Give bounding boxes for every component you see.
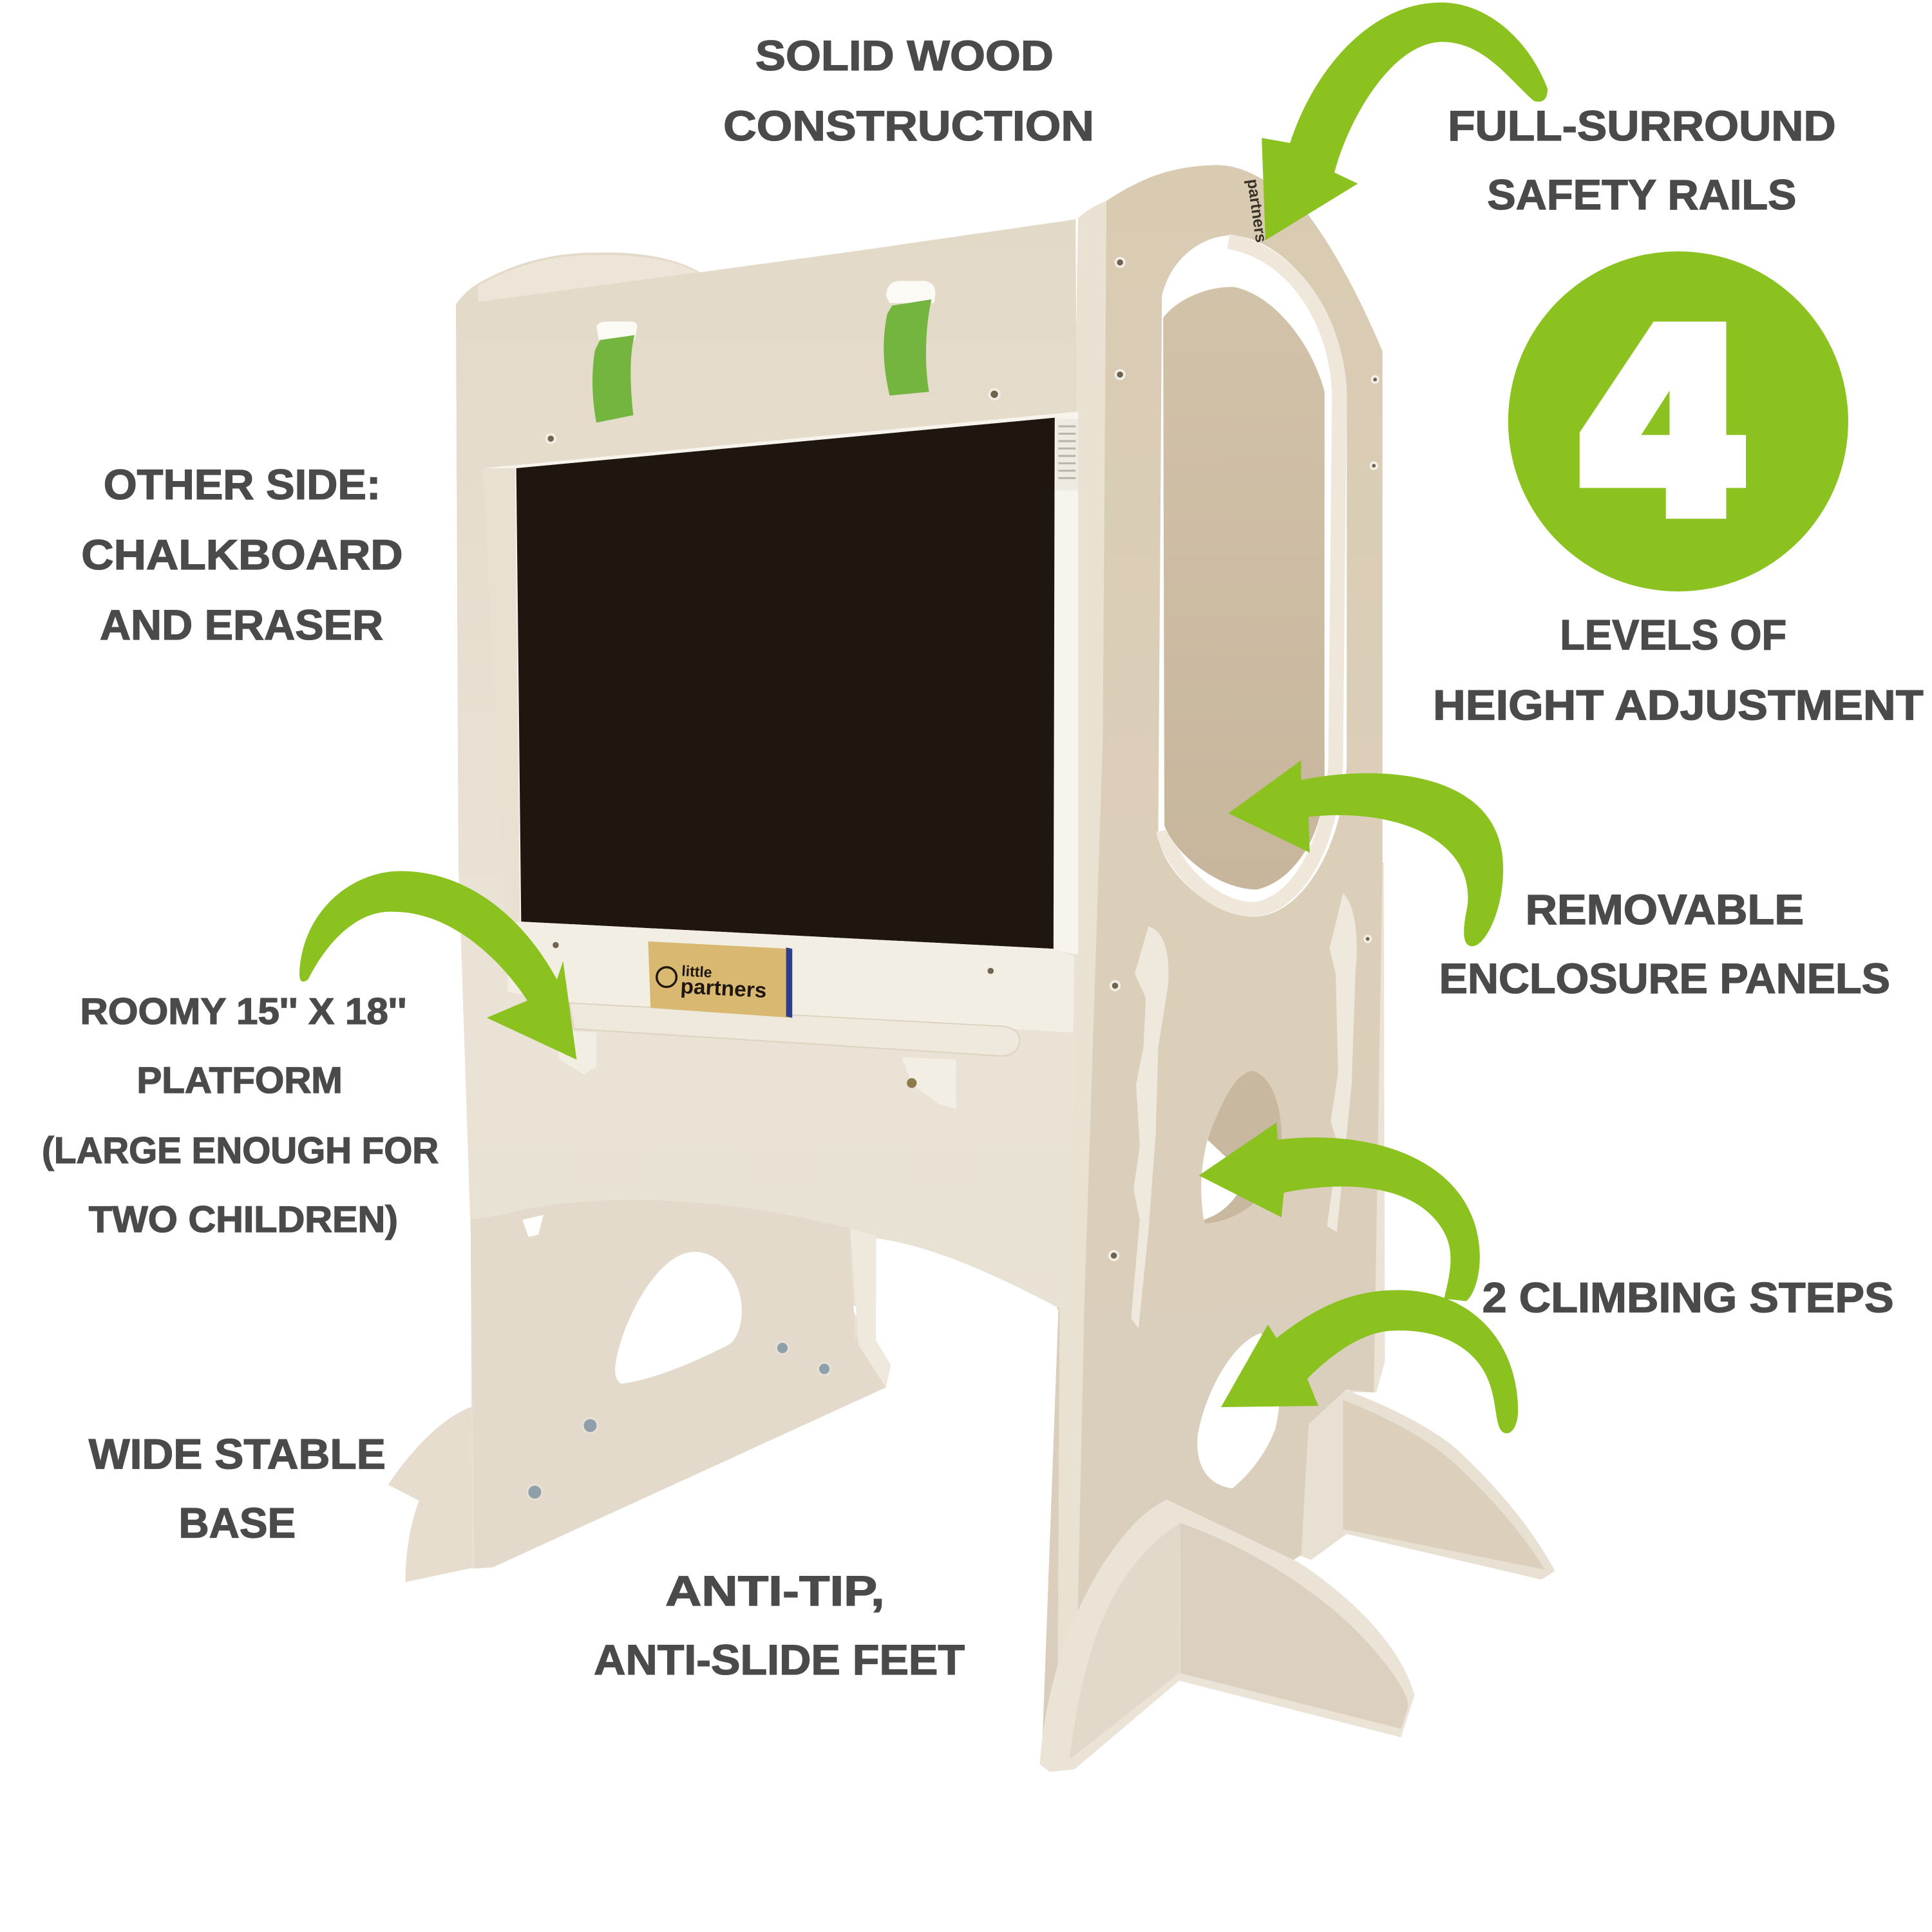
- text: removable enclosure panels: ENCLOSURE PANELS: [1439, 954, 1890, 1002]
- rear left foot: [388, 1407, 493, 1582]
- top-left rear arch: [478, 255, 697, 302]
- left frame bevel: [483, 468, 520, 924]
- arched rim: [1163, 242, 1340, 909]
- green strap left: [592, 321, 637, 422]
- text: other side chalkboard and eraser: AND ERASER: [100, 601, 383, 649]
- text: other side chalkboard and eraser: CHALKBOARD: [81, 531, 403, 578]
- text: solid wood construction: SOLID WOOD: [755, 32, 1054, 79]
- text: levels of height adjustment: HEIGHT ADJUSTMENT: [1433, 681, 1924, 728]
- side panel arched opening: [1158, 235, 1347, 916]
- text: other side chalkboard and eraser: [81, 460, 403, 649]
- rear right foot: [1299, 1390, 1555, 1580]
- text: roomy platform: TWO CHILDREN): [89, 1199, 398, 1240]
- arrow: platform: [299, 871, 576, 1059]
- chalkboard: [516, 418, 1055, 949]
- text: wide stable base: WIDE STABLE: [89, 1430, 386, 1478]
- screws: [547, 258, 1378, 1260]
- text: other side chalkboard and eraser: OTHER SIDE:: [104, 460, 381, 508]
- text: wide stable base: BASE: [178, 1499, 296, 1547]
- text: levels of height adjustment: [1433, 611, 1924, 728]
- side cutout right: [1327, 893, 1357, 1232]
- text: roomy platform: PLATFORM: [137, 1060, 343, 1101]
- eraser block: partners: [680, 974, 767, 1002]
- shelf brackets: [554, 1030, 956, 1109]
- chalkboard frame: [483, 412, 1078, 955]
- text: removable enclosure panels: [1439, 886, 1890, 1002]
- eraser block: little: [681, 962, 712, 981]
- side panel: [1040, 165, 1383, 1769]
- badge: number 4: [1508, 251, 1848, 591]
- green strap right: [884, 281, 935, 395]
- arrow: upper climbing step: [1199, 1122, 1480, 1301]
- text: roomy platform: [42, 991, 439, 1240]
- text: removable enclosure panels: REMOVABLE: [1526, 886, 1804, 933]
- text: full-surround safety rails: SAFETY RAILS: [1487, 171, 1797, 218]
- near foot right fin: [1180, 1523, 1408, 1728]
- lower front panel: [471, 1200, 889, 1569]
- lower step hole: [1197, 1333, 1280, 1488]
- product photo: learning tower: [388, 165, 1555, 1774]
- text: roomy platform: ROOMY 15'' X 18'': [80, 991, 406, 1032]
- front panel hole: [615, 1252, 742, 1384]
- text: solid wood construction: CONSTRUCTION: [723, 102, 1094, 149]
- text: anti-tip anti-slide feet: ANTI-TIP,: [665, 1567, 885, 1615]
- text: levels of height adjustment: LEVELS OF: [1560, 611, 1786, 658]
- notch: [522, 1215, 544, 1237]
- side cutout left: [1131, 927, 1169, 1328]
- text: full-surround safety rails: [1448, 102, 1836, 218]
- bolts: [527, 1342, 831, 1499]
- side panel front edge highlight: [1057, 201, 1106, 1769]
- text: full-surround safety rails: FULL-SURROUND: [1448, 102, 1836, 149]
- text: solid wood construction: [723, 32, 1094, 149]
- side logo: partners: [1244, 178, 1270, 243]
- lower board strip: [507, 922, 1074, 1032]
- removable enclosure panel: [1163, 287, 1325, 889]
- text: roomy platform: (LARGE ENOUGH FOR: [42, 1130, 439, 1171]
- text: climbing steps: 2 CLIMBING STEPS: [1482, 1274, 1894, 1321]
- thin white sliver beside panel: [1325, 493, 1328, 739]
- arrow: safety rails: [1262, 3, 1548, 240]
- eraser block: [648, 942, 792, 1018]
- shelf: [569, 1003, 1019, 1056]
- white gap under the board: [493, 1238, 1058, 1774]
- text: anti-tip anti-slide feet: ANTI-SLIDE FEET: [594, 1636, 965, 1683]
- safety label: [1056, 419, 1078, 490]
- text: anti-tip anti-slide feet: [594, 1567, 965, 1683]
- rear panel edge: [1349, 862, 1385, 1392]
- near foot left fin: [1070, 1523, 1180, 1759]
- rear right foot fin: [1343, 1399, 1545, 1570]
- lower panel edge band: [850, 1229, 891, 1387]
- upper step hole: [1202, 1071, 1282, 1224]
- front board: [456, 220, 1078, 1569]
- text: wide stable base: [89, 1430, 386, 1547]
- arrow: lower climbing step: [1221, 1290, 1518, 1434]
- near foot: [1040, 1499, 1414, 1772]
- arrow: enclosure panels: [1229, 760, 1503, 946]
